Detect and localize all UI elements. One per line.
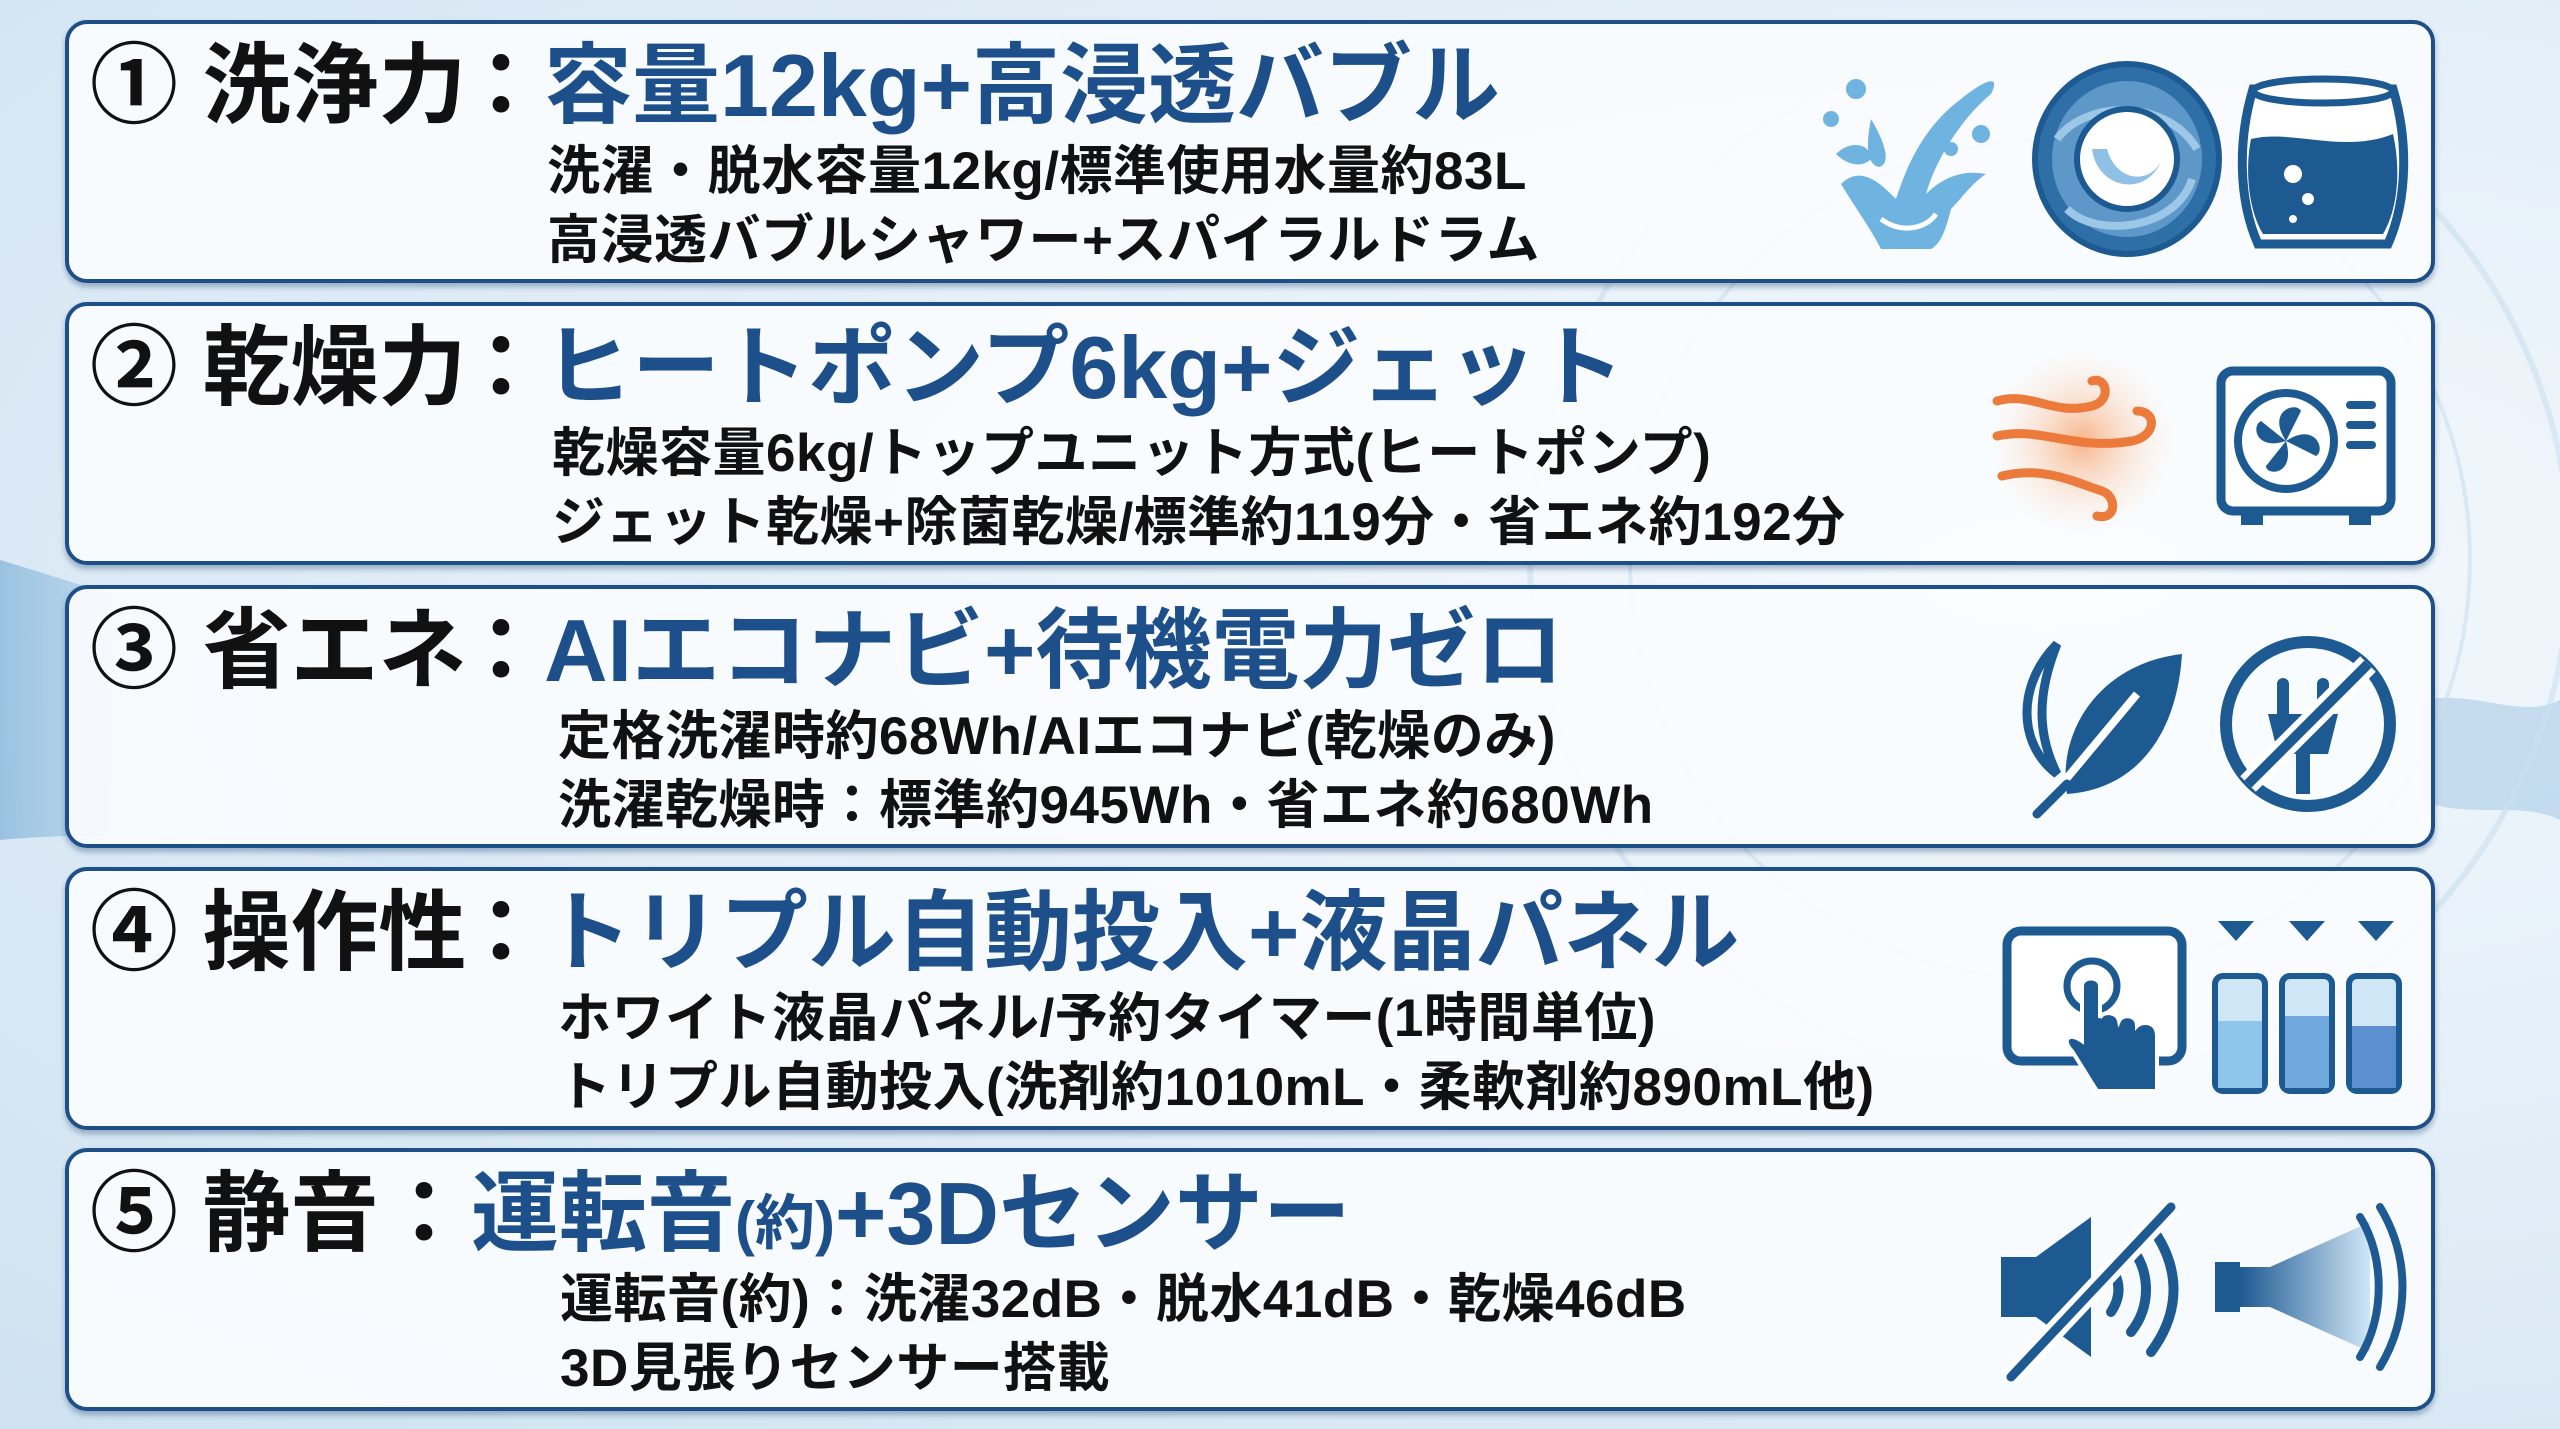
details 3: 定格洗濯時約68Wh/AIエコナビ(乾燥のみ) (558, 707, 1556, 766)
icon: hot wind (1992, 362, 2160, 522)
icon: touch panel (2002, 926, 2186, 1089)
details 5: 運転音(約)：洗濯32dB・脱水41dB・乾燥46dB (560, 1270, 1687, 1329)
details 1 (547, 142, 1540, 270)
heading 4 (90, 883, 1739, 982)
icon: muted speaker (2001, 1202, 2178, 1382)
icon: no standby power (2220, 636, 2396, 812)
panel 5: quiet: 運転音(約)+3Dセンサー (471, 1164, 1351, 1263)
panel 1: washing: ： (457, 36, 545, 135)
heading 5: ⑤ 静音 (90, 1164, 378, 1263)
details 4: ホワイト液晶パネル/予約タイマー(1時間単位) (558, 989, 1656, 1048)
details 5 (560, 1270, 1687, 1398)
details 2: 乾燥容量6kg/トップユニット方式(ヒートポンプ) (552, 424, 1711, 483)
heading 1 (90, 36, 1500, 135)
panel 5: quiet (65, 1148, 2435, 1411)
icon: swirl drum (2032, 61, 2222, 257)
icon: water splash (1823, 79, 1994, 249)
heading 4: ④ 操作性 (90, 883, 466, 982)
panel 3: energy saving: AIエコナビ+待機電力ゼロ (544, 601, 1563, 700)
panel 3: energy saving: ： (457, 601, 545, 700)
details 4 (558, 989, 1875, 1117)
panel 2: drying: ： (457, 318, 545, 417)
panel 4: operation: トリプル自動投入+液晶パネル (544, 883, 1739, 982)
panel 2: drying: ヒートポンプ6kg+ジェット (544, 318, 1624, 417)
heading 1: ① 洗浄力 (90, 36, 466, 135)
details 3 (558, 707, 1654, 835)
panel 2: drying (65, 302, 2435, 565)
details 1: 洗濯・脱水容量12kg/標準使用水量約83L (547, 142, 1527, 201)
heading 2: ② 乾燥力 (90, 318, 466, 417)
panel 1: washing (65, 20, 2435, 283)
panel 5: quiet: ： (380, 1164, 468, 1263)
icon: three bottles (2212, 921, 2402, 1094)
details 5: 3D見張りセンサー搭載 (560, 1339, 1110, 1398)
details 2 (552, 424, 1846, 552)
heading 2 (90, 318, 1624, 417)
panel 4: operation: ： (457, 883, 545, 982)
icon: heat pump unit (2216, 366, 2396, 525)
details 4: トリプル自動投入(洗剤約1010mL・柔軟剤約890mL他) (558, 1058, 1875, 1117)
heading 5 (90, 1164, 1351, 1263)
heading 3 (90, 601, 1563, 700)
details 1: 高浸透バブルシャワー+スパイラルドラム (547, 211, 1540, 270)
details 2: ジェット乾燥+除菌乾燥/標準約119分・省エネ約192分 (552, 493, 1846, 552)
panel 4: operation (65, 867, 2435, 1130)
details 3: 洗濯乾燥時：標準約945Wh・省エネ約680Wh (558, 776, 1654, 835)
icon: leaf (2022, 640, 2182, 818)
panel 1: washing: 容量12kg+高浸透バブル (544, 36, 1500, 135)
panel 3: energy saving (65, 585, 2435, 848)
icon: water tank (2238, 76, 2408, 248)
icon: sensor beam (2215, 1203, 2406, 1371)
heading 3: ③ 省エネ (90, 601, 466, 700)
